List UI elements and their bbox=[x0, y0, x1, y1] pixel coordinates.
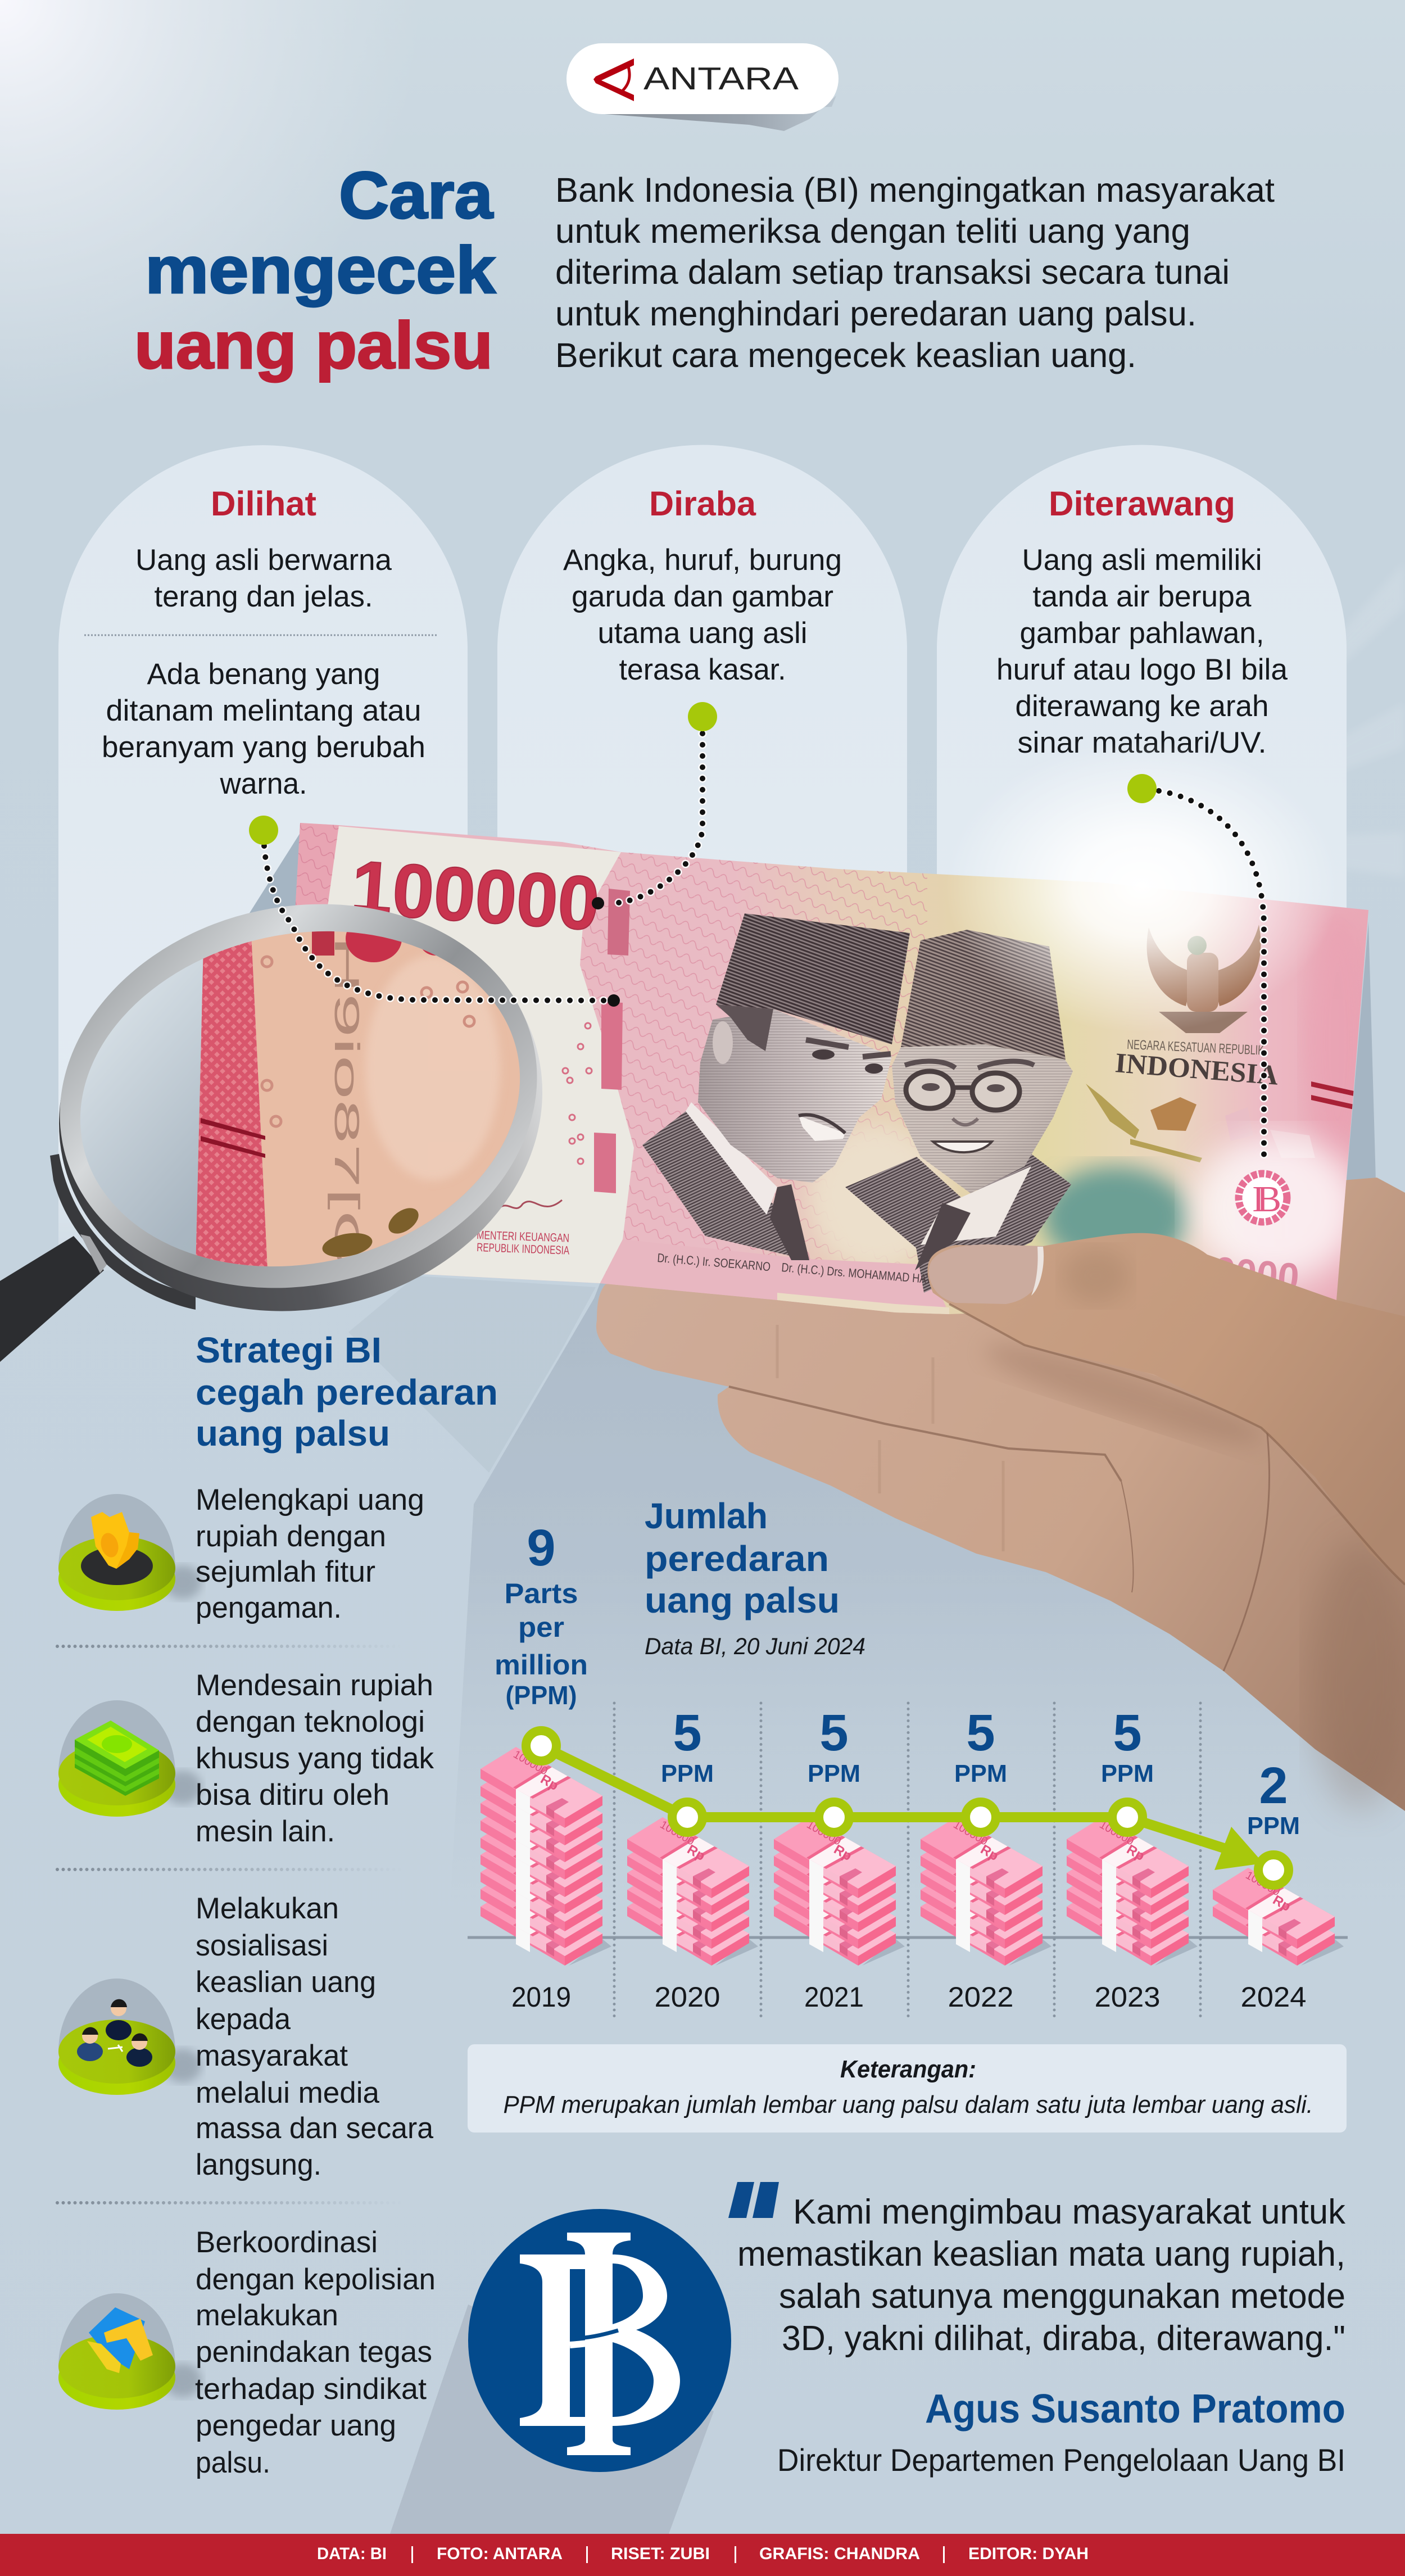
footer: EDITOR: DYAH bbox=[968, 2545, 1089, 2563]
strategy item 2: dengan teknologi bbox=[196, 1705, 425, 1739]
chart heading: peredaran bbox=[645, 1538, 829, 1579]
logo: ANTARA pill: ANTARA bbox=[643, 61, 799, 97]
quote attribution bbox=[777, 2387, 1345, 2478]
stack 2021: 100000 bbox=[805, 1818, 843, 1848]
value labels: PPM bbox=[661, 1760, 714, 1787]
year labels: 2020 bbox=[654, 1981, 720, 2013]
banknote: Dr. (H.C.) Ir. SOEKARNO bbox=[657, 1251, 771, 1274]
value labels: per bbox=[518, 1611, 564, 1643]
value labels: PPM bbox=[1247, 1812, 1300, 1840]
value labels: Parts bbox=[505, 1578, 578, 1609]
light rays bbox=[1146, 562, 1405, 877]
panel: Diraba: Diraba bbox=[649, 485, 756, 523]
strategy item 4: palsu. bbox=[196, 2446, 270, 2479]
banknote bbox=[270, 815, 1371, 1321]
banknote: MENTERI KEUANGAN bbox=[477, 1229, 570, 1245]
footer: FOTO: ANTARA bbox=[437, 2545, 563, 2563]
stack 2020: Rp bbox=[685, 1842, 708, 1864]
value labels bbox=[495, 1519, 1300, 1840]
year labels: 2021 bbox=[804, 1981, 864, 2013]
strategy item 4: terhadap sindikat bbox=[195, 2373, 427, 2406]
strategy item 4: penindakan tegas bbox=[196, 2335, 432, 2369]
strategy item 2: khusus yang tidak bbox=[196, 1742, 434, 1775]
panel: Dilihat: Dilihat bbox=[211, 485, 316, 523]
panel: Dilihat: terang dan jelas. bbox=[154, 580, 373, 613]
panel: Diterawang: Diterawang bbox=[1049, 485, 1235, 523]
strategy item 4: pengedar uang bbox=[196, 2409, 396, 2442]
stack 2023: Rp bbox=[1124, 1842, 1147, 1864]
panel: Diterawang: Uang asli memiliki bbox=[1022, 544, 1262, 577]
banknote: INDONESIA bbox=[1114, 1047, 1280, 1091]
heading: Strategi BI: cegah peredaran bbox=[196, 1372, 498, 1413]
thumb bbox=[927, 1233, 1405, 1584]
magnifier bbox=[0, 861, 581, 1362]
strategy item 1: Melengkapi uang bbox=[196, 1483, 424, 1516]
strategy item 4 bbox=[58, 2226, 436, 2479]
quote text: Kami mengimbau masyarakat untuk bbox=[793, 2193, 1346, 2231]
chart heading bbox=[645, 1496, 865, 1659]
title: Cara bbox=[339, 159, 493, 233]
value labels: 5 bbox=[1113, 1704, 1142, 1762]
callout: Keterangan bbox=[468, 2044, 1347, 2133]
strategy item 2: bisa ditiru oleh bbox=[196, 1778, 389, 1812]
stack 2022: Rp bbox=[978, 1842, 1001, 1864]
icon: handshake bbox=[58, 2293, 202, 2410]
strategy item 2: mesin lain. bbox=[196, 1815, 335, 1848]
panel: Diraba: garuda dan gambar bbox=[572, 580, 833, 613]
value labels: 5 bbox=[673, 1704, 702, 1762]
quote attribution: Direktur Departemen Pengelolaan Uang BI bbox=[777, 2442, 1345, 2478]
value labels: 5 bbox=[819, 1704, 849, 1762]
strategy item 4: Berkoordinasi bbox=[196, 2226, 378, 2259]
banknote: IB bbox=[1252, 1179, 1280, 1220]
magnified banknote bbox=[195, 915, 562, 1293]
quote mark bbox=[728, 2182, 779, 2218]
green dots and dotted connectors bbox=[249, 702, 1264, 1161]
stack 2021: Rp bbox=[831, 1842, 854, 1864]
stack 2020 bbox=[627, 1817, 758, 1966]
trend line bbox=[526, 1731, 1289, 1885]
strategy item 4: dengan kepolisian bbox=[196, 2263, 436, 2296]
heading: Strategi BI bbox=[196, 1330, 498, 1454]
strategy item 2: Mendesain rupiah bbox=[196, 1669, 433, 1702]
stack 2024 bbox=[1213, 1868, 1344, 1966]
handle bbox=[0, 1154, 196, 1362]
footer: RISET: ZUBI bbox=[611, 2545, 710, 2563]
right pink bbox=[1306, 924, 1362, 1150]
logo: Bank Indonesia bbox=[468, 2209, 731, 2472]
stack 2020: 100000 bbox=[658, 1818, 696, 1848]
stack 2024: 100000 bbox=[1243, 1869, 1282, 1899]
stack 2023 bbox=[1067, 1817, 1198, 1966]
value labels: 2 bbox=[1259, 1757, 1288, 1814]
panel: Diterawang: huruf atau logo BI bila bbox=[996, 653, 1288, 686]
panel: Dilihat: warna. bbox=[220, 767, 307, 800]
glow bbox=[1191, 1135, 1360, 1282]
magnified banknote: H9io87[C bbox=[327, 936, 366, 1267]
bill cast shadows bbox=[244, 833, 1376, 1186]
teal patch bbox=[1043, 1166, 1189, 1267]
quote text: salah satunya menggunakan metode bbox=[779, 2277, 1345, 2316]
strategy item 3: kepada bbox=[196, 2003, 291, 2036]
footer: GRAFIS: CHANDRA bbox=[759, 2545, 920, 2563]
stack 2024: Rp bbox=[1270, 1893, 1293, 1914]
year labels: 2022 bbox=[948, 1981, 1014, 2013]
panel: Diterawang: diterawang ke arah bbox=[1015, 690, 1269, 723]
heading: Strategi BI: Strategi BI bbox=[196, 1330, 382, 1370]
title bbox=[134, 159, 496, 383]
strategy item 3: melalui media bbox=[196, 2076, 380, 2109]
stack 2022: 100000 bbox=[951, 1818, 990, 1848]
map bbox=[1086, 1084, 1139, 1139]
rim bbox=[21, 861, 581, 1355]
intro text: untuk memeriksa dengan teliti uang yang bbox=[555, 212, 1190, 250]
intro text: Berikut cara mengecek keaslian uang. bbox=[555, 336, 1136, 374]
value labels: PPM bbox=[808, 1760, 860, 1787]
intro text: Bank Indonesia (BI) mengingatkan masyarakat bbox=[555, 171, 1275, 209]
strategy item 3: sosialisasi bbox=[196, 1929, 328, 1962]
intro text: untuk menghindari peredaran uang palsu. bbox=[555, 295, 1196, 333]
footer bbox=[0, 2534, 1405, 2576]
strategy item 4: melakukan bbox=[196, 2299, 338, 2332]
stack 2021 bbox=[774, 1817, 905, 1966]
stack 2019 bbox=[481, 1747, 611, 1966]
panel: Diterawang bbox=[937, 445, 1347, 1270]
callout: Keterangan: PPM merupakan jumlah lembar uang palsu dalam satu juta lembar uang asli. bbox=[504, 2091, 1313, 2118]
hatta suit bbox=[845, 1154, 1071, 1293]
intro text: diterima dalam setiap transaksi secara tunai bbox=[555, 253, 1230, 291]
strategy item 1 bbox=[58, 1483, 424, 1624]
panel: Diterawang: tanda air berupa bbox=[1033, 580, 1252, 613]
strategy item 3: Melakukan bbox=[196, 1892, 339, 1925]
year labels: 2019 bbox=[511, 1981, 571, 2013]
panel: Diraba: utama uang asli bbox=[598, 617, 807, 650]
seal bbox=[1239, 1174, 1287, 1222]
year labels: 2024 bbox=[1241, 1981, 1306, 2013]
quote text bbox=[737, 2193, 1346, 2358]
strategy item 1: pengaman. bbox=[196, 1591, 342, 1624]
panel: Dilihat: Uang asli berwarna bbox=[135, 544, 392, 577]
title: uang palsu bbox=[134, 309, 493, 383]
value labels: PPM bbox=[954, 1760, 1007, 1787]
heading: Strategi BI: uang palsu bbox=[196, 1413, 390, 1454]
icon: money bbox=[58, 1700, 202, 1817]
stack 2023: 100000 bbox=[1097, 1818, 1136, 1848]
chart heading: Data BI, 20 Juni 2024 bbox=[645, 1633, 865, 1659]
value labels: 9 bbox=[527, 1519, 556, 1577]
strategy item 3: massa dan secara bbox=[196, 2112, 434, 2145]
strategy item 1: rupiah dengan bbox=[196, 1520, 386, 1553]
quote text: memastikan keaslian mata uang rupiah, bbox=[737, 2235, 1345, 2274]
garuda bbox=[1147, 925, 1261, 1033]
strategy item 1: sejumlah fitur bbox=[196, 1555, 375, 1588]
banknote: NEGARA KESATUAN REPUBLIK bbox=[1127, 1037, 1265, 1058]
panel: Dilihat: Ada benang yang bbox=[147, 658, 380, 691]
denominations: 100000 bbox=[348, 844, 602, 947]
year labels bbox=[511, 1981, 1306, 2013]
strategy item 2 bbox=[58, 1669, 434, 1848]
panel: Dilihat bbox=[58, 445, 468, 1270]
intro text bbox=[555, 171, 1275, 374]
white section bbox=[328, 826, 634, 1283]
banknote: 00000 bbox=[1191, 1247, 1301, 1301]
strategy item 3: masyarakat bbox=[196, 2039, 348, 2072]
logo: ANTARA pill bbox=[566, 43, 839, 131]
sun flare bbox=[945, 740, 1339, 1033]
year labels: 2023 bbox=[1095, 1981, 1160, 2013]
strategy item 3: langsung. bbox=[196, 2148, 321, 2181]
callout: Keterangan: Keterangan: bbox=[840, 2056, 976, 2083]
chart heading: Jumlah bbox=[645, 1496, 768, 1536]
banknote: Dr. (H.C.) Drs. MOHAMMAD HATTA bbox=[781, 1260, 945, 1287]
soekarno face bbox=[698, 1009, 892, 1183]
icon: security feature bbox=[58, 1494, 202, 1611]
soekarno suit bbox=[642, 1111, 809, 1260]
hatta face bbox=[892, 1044, 1073, 1193]
hatta peci bbox=[901, 930, 1066, 1060]
panel: Diraba bbox=[497, 445, 907, 1270]
icon: people bbox=[58, 1979, 202, 2095]
stack 2019: Rp bbox=[538, 1772, 561, 1794]
stack 2022 bbox=[921, 1817, 1052, 1966]
title: mengecek bbox=[145, 233, 496, 307]
panel: Diterawang: gambar pahlawan, bbox=[1019, 617, 1265, 650]
stack 2019: 100000 bbox=[511, 1748, 550, 1778]
strategy item 3 bbox=[58, 1892, 434, 2181]
value labels: PPM bbox=[1101, 1760, 1154, 1787]
banknote: REPUBLIK INDONESIA bbox=[477, 1241, 570, 1257]
panel: Dilihat: ditanam melintang atau bbox=[106, 694, 422, 727]
quote text: 3D, yakni dilihat, diraba, diterawang." bbox=[782, 2319, 1345, 2358]
quote attribution: Agus Susanto Pratomo bbox=[925, 2387, 1345, 2432]
strategy item 3: keaslian uang bbox=[196, 1966, 376, 1999]
cream area behind portraits bbox=[809, 1124, 944, 1270]
chart: counterfeit money per year bbox=[468, 1519, 1348, 2016]
value labels: (PPM) bbox=[506, 1681, 577, 1710]
panel: Diterawang: sinar matahari/UV. bbox=[1017, 726, 1267, 759]
footer: DATA: BI bbox=[317, 2545, 387, 2563]
value labels: million bbox=[495, 1649, 588, 1681]
hand behind banknote bbox=[596, 1178, 1405, 1811]
bottom pink strip bbox=[600, 1239, 946, 1307]
panel: Diraba: Angka, huruf, burung bbox=[563, 544, 842, 577]
soekarno peci bbox=[716, 913, 910, 1044]
chart heading: uang palsu bbox=[645, 1580, 840, 1620]
value labels: 5 bbox=[966, 1704, 995, 1762]
panel: Diraba: terasa kasar. bbox=[619, 653, 786, 686]
panel: Dilihat: beranyam yang berubah bbox=[102, 731, 425, 764]
